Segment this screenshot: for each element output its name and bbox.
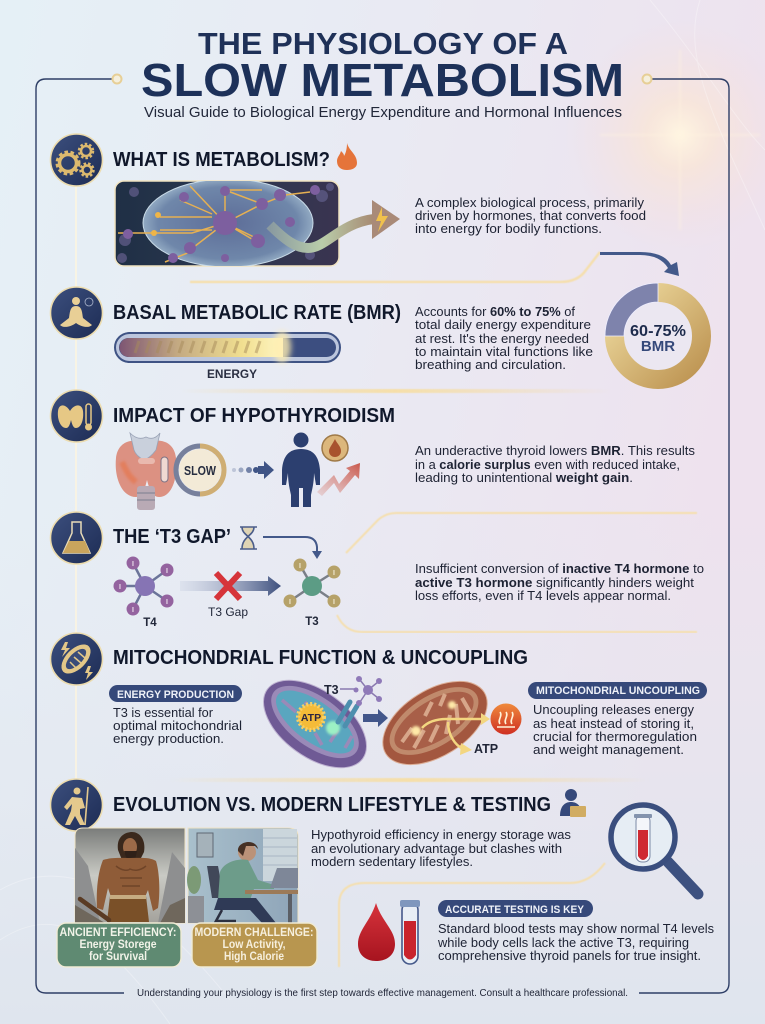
label: modern challenge: High Calorie [224, 951, 284, 963]
icon: office worker [560, 789, 586, 817]
arrow: weight gain [317, 463, 360, 496]
heading: THE ‘T3 GAP’ [113, 526, 231, 548]
icon: coin flame [322, 435, 348, 461]
icon: mitochondrion [50, 633, 102, 685]
icon: walking figure [50, 779, 102, 831]
callout: accurate testing: comprehensive thyroid panels for true insight. [438, 949, 701, 963]
heading: BASAL METABOLIC RATE (BMR) [113, 302, 401, 324]
text block [415, 444, 695, 485]
text block: at rest. It's the energy needed [415, 332, 589, 346]
arrow: food to energy [270, 200, 400, 248]
icon: person [282, 432, 320, 507]
label: modern challenge [192, 923, 317, 967]
image: ancient human [75, 828, 185, 923]
heading: EVOLUTION VS. MODERN LIFESTYLE & TESTING [113, 794, 551, 816]
icon: flask [50, 512, 102, 564]
label: ancient efficiency: for Survival [89, 951, 147, 963]
text block: to maintain vital functions like [415, 345, 593, 359]
illustration: mitochondrion with ATP [248, 663, 382, 785]
text block: Hypothyroid efficiency in energy storage was [311, 828, 571, 842]
molecule: T4 [114, 556, 174, 629]
heading: IMPACT OF HYPOTHYROIDISM [113, 405, 395, 427]
text block: breathing and circulation. [415, 358, 566, 372]
callout: uncoupling: Uncoupling releases energy [533, 703, 695, 717]
icon: gears [50, 134, 102, 186]
text block [415, 196, 646, 236]
section: mitochondria [50, 633, 707, 785]
label: ancient efficiency: Energy Storege [80, 939, 156, 951]
label: modern challenge: Low Activity, [222, 939, 286, 951]
arrow: blocked conversion: T3 Gap [208, 605, 248, 619]
energy bar [115, 331, 340, 363]
icon: heat [490, 704, 522, 734]
dotted arrow [232, 461, 274, 479]
molecule: T4: T4 [143, 617, 157, 629]
illustration: thyroid gland [116, 433, 176, 510]
text block: an evolutionary advantage but clashes with [311, 842, 562, 856]
molecule: T3: I [333, 599, 335, 606]
illustration: mitochondrion with ATP: ATP [301, 712, 321, 724]
molecule: T3: I [289, 599, 291, 606]
arrow: hourglass to T3 [263, 537, 322, 559]
text block: An underactive thyroid lowers BMR. This results [415, 444, 695, 458]
callout: accurate testing: while body cells lack the active T3, requiring [437, 936, 689, 950]
image: modern office [187, 828, 298, 923]
title line 2: SLOW METABOLISM [141, 54, 624, 106]
callout: energy production: ENERGY PRODUCTION [117, 689, 234, 701]
section: what is metabolism [50, 134, 679, 276]
label: ancient efficiency: ANCIENT EFFICIENCY: [60, 927, 176, 939]
molecule: T4: I [132, 561, 134, 568]
molecule: T4: I [132, 607, 134, 614]
icon: thyroid and thermometer [50, 390, 102, 442]
molecule: T3: I [299, 563, 301, 570]
molecule: T3: I [333, 570, 335, 577]
icon: flame [337, 143, 357, 170]
bar label: ENERGY [207, 367, 257, 381]
callout: energy production [109, 685, 242, 746]
subtitle: Visual Guide to Biological Energy Expenditure and Hormonal Influences [144, 105, 622, 121]
icon: blood drop [358, 903, 395, 961]
callout: uncoupling: crucial for thermoregulation [533, 730, 697, 744]
text block [415, 305, 593, 372]
icon: magnifier with tube [611, 805, 698, 894]
molecule: T4: I [166, 599, 168, 606]
text block: loss efforts, even if T4 levels appear normal. [415, 589, 671, 603]
callout: uncoupling: and weight management. [533, 743, 684, 757]
label: modern challenge: MODERN CHALLENGE: [194, 927, 314, 939]
label: ATP: ATP [474, 742, 498, 756]
callout: uncoupling [528, 682, 707, 757]
text block [415, 562, 704, 603]
title block [141, 26, 624, 121]
label: T3 molecule [324, 676, 382, 706]
label: T3 molecule: T3 [324, 683, 339, 697]
illustration: cell network [115, 179, 339, 267]
icon: hourglass [240, 527, 257, 549]
callout: accurate testing: Standard blood tests may show normal T4 levels [438, 922, 714, 936]
gold connector lines [76, 186, 697, 967]
callout: accurate testing [437, 900, 714, 963]
section: hypothyroidism [50, 390, 695, 510]
callout: accurate testing: ACCURATE TESTING IS KEY [445, 904, 585, 916]
callout: energy production: energy production. [113, 732, 224, 746]
label: ancient efficiency [57, 923, 181, 967]
title line 1: THE PHYSIOLOGY OF A [198, 26, 568, 61]
section: T3 gap [50, 512, 704, 629]
illustration: uncoupled mitochondrion [368, 664, 502, 782]
section: BMR [50, 283, 702, 381]
molecule: T4: I [166, 568, 168, 575]
text block: driven by hormones, that converts food [415, 209, 646, 223]
arrow: to BMR [600, 252, 679, 276]
heading: MITOCHONDRIAL FUNCTION & UNCOUPLING [113, 647, 528, 669]
section: evolution and testing [50, 779, 714, 967]
callout: energy production: optimal mitochondrial [113, 719, 242, 733]
text block [311, 828, 571, 869]
footer note: Understanding your physiology is the first step towards effective management. Consult a healthcare professional. [137, 988, 628, 999]
callout: uncoupling: MITOCHONDRIAL UNCOUPLING [536, 685, 700, 697]
icon: meditation [50, 287, 102, 339]
molecule: T4: I [119, 584, 121, 591]
text block: Insufficient conversion of inactive T4 hormone to [415, 562, 704, 576]
donut chart: 60-75% [630, 323, 686, 340]
donut chart: BMR [641, 338, 675, 355]
heading: WHAT IS METABOLISM? [113, 149, 330, 171]
donut chart [605, 283, 702, 380]
molecule: T3: T3 [305, 616, 319, 628]
callout: uncoupling: as heat instead of storing it, [533, 717, 694, 731]
slow gauge [176, 446, 224, 494]
text block: active T3 hormone significantly hinders weight [415, 576, 695, 590]
arrow [363, 709, 388, 727]
text block: Accounts for 60% to 75% of [415, 305, 576, 319]
text block: modern sedentary lifestyles. [311, 855, 473, 869]
text block: A complex biological process, primarily [415, 196, 645, 210]
text block: in a calorie surplus even with reduced intake, [415, 458, 680, 472]
slow gauge: SLOW [184, 463, 217, 478]
molecule: T3 [284, 558, 340, 628]
text block: total daily energy expenditure [415, 318, 591, 332]
text block: into energy for bodily functions. [415, 222, 602, 236]
arrow: blocked conversion [180, 573, 281, 619]
text block: leading to unintentional weight gain . [415, 471, 633, 485]
callout: energy production: T3 is essential for [113, 706, 213, 720]
icon: test tube [400, 900, 420, 964]
